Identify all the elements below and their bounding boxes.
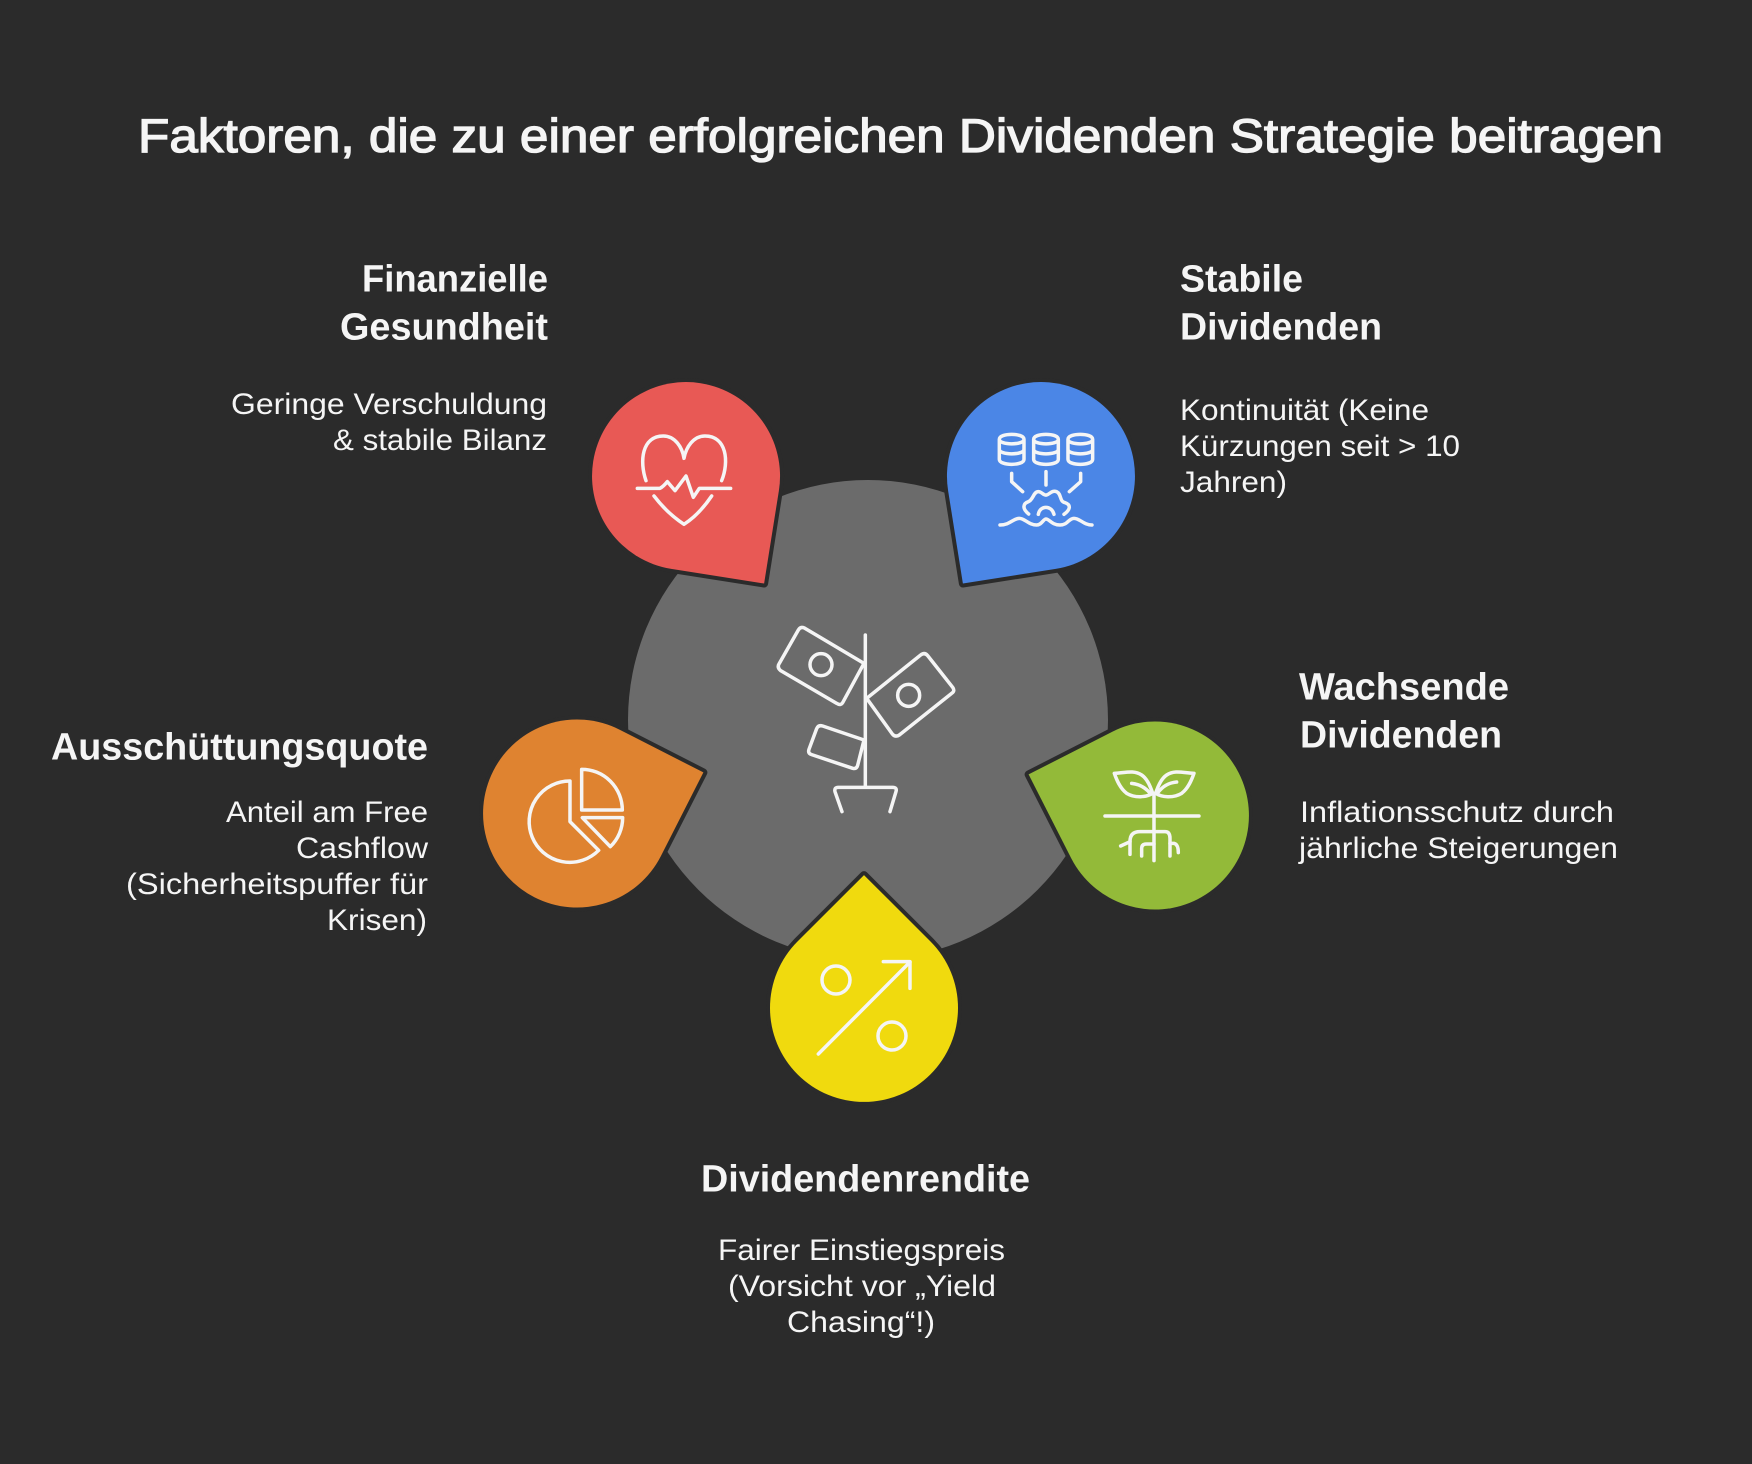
text block: Finanzielle Gesundheit: Finanzielle [362,258,548,300]
text block: Stabile Dividenden: Kontinuität (Keine [1180,394,1429,427]
text block: Finanzielle Gesundheit: Geringe Verschuldung [231,388,547,421]
text block: Dividendenrendite: Dividendenrendite [701,1158,1030,1200]
panel: Dividendenrendite drop [770,875,958,1102]
text block: Stabile Dividenden: Stabile [1180,258,1303,300]
text block: Ausschüttungsquote: Krisen) [327,904,427,937]
text block: Wachsende Dividenden: Inflationsschutz durch [1300,796,1614,829]
central grey circle [628,480,1108,960]
text block: Stabile Dividenden: Jahren) [1180,466,1287,499]
text block: Ausschüttungsquote: Ausschüttungsquote [51,726,428,768]
text block: Dividendenrendite: (Vorsicht vor „Yield [728,1270,996,1303]
text block: Ausschüttungsquote [51,726,429,937]
icon: pie chart [529,769,623,862]
panel: Finanzielle Gesundheit drop [555,345,840,639]
text block: Dividendenrendite [701,1158,1030,1339]
text block: Ausschüttungsquote: Cashflow [296,832,429,865]
icon: percent arrow [818,962,910,1054]
text block: Dividendenrendite: Chasing“!) [787,1306,935,1339]
panel: Wachsende Dividenden drop [1000,685,1273,934]
panel: Ausschüttungsquote drop [459,683,732,932]
icon: money plant [778,627,954,812]
title: Faktoren, die zu einer erfolgreichen Dividenden Strategie beitragen [138,109,1663,162]
panel: Stabile Dividenden drop [887,345,1172,639]
text block: Stabile Dividenden: Kürzungen seit > 10 [1180,430,1460,463]
icon: heart with pulse [637,436,731,524]
text block: Dividendenrendite: Fairer Einstiegspreis [718,1234,1005,1267]
icon: sprout with roots [1105,772,1199,861]
text block: Stabile Dividenden: Dividenden [1180,306,1382,348]
text block: Wachsende Dividenden: jährliche Steigerungen [1298,832,1618,865]
text block: Ausschüttungsquote: (Sicherheitspuffer für [126,868,428,901]
text block: Stabile Dividenden [1180,258,1460,499]
text block: Finanzielle Gesundheit [231,258,548,457]
text block: Finanzielle Gesundheit: & stabile Bilanz [333,424,547,457]
text block: Ausschüttungsquote: Anteil am Free [226,796,428,829]
text block: Wachsende Dividenden [1298,666,1618,865]
text block: Finanzielle Gesundheit: Gesundheit [340,306,548,348]
text block: Wachsende Dividenden: Wachsende [1299,666,1509,708]
text block: Wachsende Dividenden: Dividenden [1300,714,1502,756]
icon: coins and gear [999,434,1093,525]
